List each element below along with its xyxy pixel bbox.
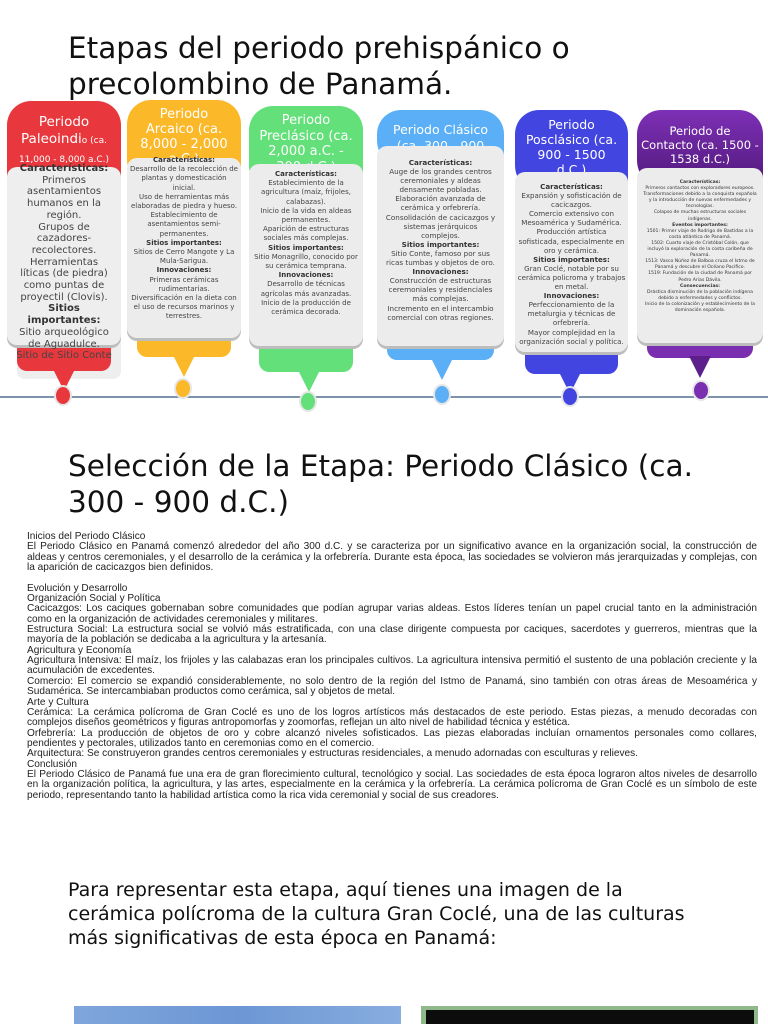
card: Paleoindio: Características: [20,163,108,174]
text block: periodo clásico: El Periodo Clásico en Panamá comenzó alrededor del año 300 d.C. y se caracteriza por un significativo avance en la organización social, la construcción de aldeas y centros ceremoniales, y el desarrollo de la cerámica y la orfebrería. Durante esta época, las sociedades se volvieron más jerarquizadas y complejas, con la aparición de cacicazgos bien definidos. [27,541,757,573]
card: Clásico: Características: [409,158,472,167]
card: Contacto [637,110,763,401]
card: Paleoindio: Sitio de Sitio Conte [16,350,112,361]
heading: selección [68,449,693,519]
card: Contacto: Periodo de [670,124,730,138]
card: Preclásico: Sitio Monagrillo, conocido por su cerámica temprana. [254,253,358,270]
card: Preclásico: Innovaciones: [279,271,333,279]
card: Posclásico: Mayor complejidad en la organización social y política. [519,328,624,346]
card: Preclásico: Periodo [282,113,330,128]
card: Arcaico: Desarrollo de la recolección de plantas y domesticación inicial. [130,165,238,192]
card: Contacto: 1538 d.C.) [670,152,730,166]
text block: periodo clásico: Conclusión [27,759,77,770]
card: Contacto: Drástica disminución de la población indígena debido a enfermedades y conflictos. [647,290,753,301]
card: Paleoindio: Paleoindio (ca. [21,131,107,147]
card: Contacto: Colapso de muchas estructuras sociales indígenas. [654,210,746,222]
text block: periodo clásico: Evolución y Desarrollo [27,583,127,594]
card: Clásico: Elaboración avanzada de cerámica y orfebrería. [395,194,486,212]
card: Contacto: Transformaciones debido a la conquista española y la introducción de nuevas enfermedades y tecnologías. [643,192,757,209]
text block: periodo clásico [27,531,757,801]
card: Clásico: Consolidación de cacicazgos y sistemas jerárquicos complejos. [386,213,495,240]
card: Arcaico [127,100,241,399]
card: Posclásico: Producción artística sofisticada, especialmente en oro y cerámica. [519,227,624,255]
card: Arcaico: Arcaico (ca. [146,122,222,137]
card: Paleoindio: 11,000 - 8,000 a.C.) [19,155,109,165]
card: Arcaico: a.C.) [169,152,199,167]
card: Paleoindio: Grupos de cazadores-recolectores. [32,222,96,256]
card: Posclásico: Perfeccionamiento de la metalurgia y técnicas de orfebrería. [528,300,615,327]
card: Contacto: Inicio de la colonización y establecimiento de la dominación española. [645,302,755,313]
card: Preclásico: 2,000 a.C. - [268,144,344,159]
card: Clásico: Auge de los grandes centros ceremoniales y aldeas densamente pobladas. [389,167,492,194]
card: Clásico: Construcción de estructuras ceremoniales y residenciales más complejas. [389,276,492,303]
title: Etapas del periodo prehispánico o [68,31,570,65]
card: Contacto: Contacto (ca. 1500 - [641,138,759,152]
card: Preclásico: Preclásico (ca. [259,128,353,144]
text block: intro imagen [68,879,685,949]
card: Posclásico: Posclásico (ca. [526,132,617,147]
card: Clásico: Sitios importantes: [402,240,479,249]
title [68,31,570,101]
card: Contacto: 1513: Vasco Núñez de Balboa cruza el Istmo de Panamá y descubre el Océano Pacífico. [645,259,755,270]
card: Arcaico: Innovaciones: [157,266,211,274]
text block: periodo clásico: El Periodo Clásico de Panamá fue una era de gran florecimiento cultural, tecnológico y social. Las sociedades de esta época lograron altos niveles de desarrollo en la organización política, la agricultura, y las artes, especialmente en la cerámica y la orfebrería. La cerámica polícroma de Gran Coclé es un símbolo de este periodo, representando tanto la habilidad artística como la rica vida ceremonial y social de sus creadores. [27,769,757,801]
card: Contacto: Consecuencias: [680,284,720,289]
card: Preclásico: Inicio de la vida en aldeas permanentes. [260,207,352,224]
card: Contacto: Características: [680,180,720,185]
image: left (blue) [74,1006,401,1024]
card: Preclásico: Inicio de la producción de cerámica decorada. [261,299,351,316]
text block: periodo clásico: Agricultura y Economía [27,645,131,656]
text block: periodo clásico: Comercio: El comercio se expandió considerablemente, no solo dentro de la región del Istmo de Panamá, sino también con otras áreas de Mesoamérica y Sudamérica. Se intercambiaban productos como cerámica, sal y objetos de metal. [27,676,757,697]
card: Posclásico: Expansión y sofisticación de cacicazgos. [521,191,622,209]
text block: periodo clásico: Cerámica: La cerámica polícroma de Gran Coclé es uno de los logros artísticos más destacados de este periodo. Estas piezas, a menudo decoradas con complejos diseños geométricos y figuras antropomorfas y zoomorfas, reflejan un alto nivel de habilidad técnica y estética. [27,707,757,728]
card: Clásico [377,110,504,405]
card: Posclásico: Innovaciones: [544,291,599,300]
text block: intro imagen: más significativas de esta época en Panamá: [68,927,497,949]
card: Posclásico: Características: [540,182,603,191]
card: Clásico: (ca. 300 - 900 [397,138,484,153]
card: Preclásico: 300 d.C.) [276,160,336,174]
card: Posclásico: Sitios importantes: [533,255,610,264]
card: Paleoindio: Sitio arqueológico de Aguadulce. [19,327,109,350]
card: Clásico: Incremento en el intercambio comercial con otras regiones. [387,304,494,322]
text block: intro imagen: cerámica polícroma de la cultura Gran Coclé, una de las culturas [68,903,685,925]
card: Preclásico: Aparición de estructuras sociales más complejas. [263,225,349,242]
card: Posclásico [515,110,628,407]
text block: intro imagen: Para representar esta etapa, aquí tienes una imagen de la [68,879,623,901]
card: Preclásico: Establecimiento de la agricultura (maíz, frijoles, calabazas). [261,179,351,206]
card: Contacto: 1519: Fundación de la ciudad de Panamá por Pedro Arias Dávila. [648,271,752,282]
card: Arcaico: Sitios de Cerro Mangote y La Mula-Sarigua. [134,248,234,265]
card: Posclásico: d.C.) [557,162,586,177]
card: Paleoindio: Primeros asentamientos humanos en la región. [27,175,101,221]
heading: selección: Selección de la Etapa: Periodo Clásico (ca. [68,449,693,483]
card: Clásico: Periodo Clásico [393,122,488,137]
card: Preclásico [249,106,363,412]
card: Preclásico: Desarrollo de técnicas agrícolas más avanzadas. [261,280,351,298]
card: Contacto: 1502: Cuarto viaje de Cristóbal Colón, que incluyó la exploración de la costa caribeña de Panamá. [647,241,753,258]
title: precolombino de Panamá. [68,67,452,101]
card: Posclásico: Comercio extensivo con Mesoamérica y Sudamérica. [521,209,622,227]
card: Posclásico: Gran Coclé, notable por su cerámica policroma y trabajos en metal. [518,264,625,291]
timeline line [0,396,768,398]
card: Paleoindio [7,101,121,406]
card: Preclásico: Características: [275,170,337,178]
card: Arcaico: 8,000 - 2,000 [140,137,228,152]
card: Contacto: 1501: Primer viaje de Rodrigo de Bastidas a la costa atlántica de Panamá. [647,229,753,240]
card: Clásico: Innovaciones: [412,267,469,276]
card: Paleoindio: Sitios importantes: [28,303,100,326]
text block: periodo clásico: Arquitectura: Se construyeron grandes centros ceremoniales y estructuras residenciales, a menudo adornadas con esculturas y relieves. [27,748,638,759]
card: Preclásico: Sitios importantes: [268,244,344,252]
text block: periodo clásico: Orfebrería: La producción de objetos de oro y cobre alcanzó niveles sofisticados. Las piezas elaboradas incluían ornamentos personales como collares, pendientes y pectorales, utilizados tanto en ceremonias como en el comercio. [27,728,757,749]
image: right (ceramic) [421,1006,758,1024]
card: Arcaico: Uso de herramientas más elaboradas de piedra y hueso. [131,193,237,210]
card: Contacto: Primeros contactos con exploradores europeos. [645,186,755,191]
card: Clásico: d.C.) [426,154,455,169]
card: Paleoindio: Periodo [39,114,89,130]
text block: periodo clásico: Arte y Cultura [27,696,89,708]
text block: periodo clásico: Cacicazgos: Los caciques gobernaban sobre comunidades que podían agrupar varias aldeas. Estos líderes tenían un papel crucial tanto en la administración como en la organización de actividades ceremoniales y militares. [27,603,757,625]
heading: selección: 300 - 900 d.C.) [68,485,289,519]
text block: periodo clásico: Agricultura Intensiva: El maíz, los frijoles y las calabazas eran los principales cultivos. La agricultura intensiva permitió el sustento de una población creciente y la acumulación de excedentes. [27,655,757,676]
card: Arcaico: Primeras cerámicas rudimentarias. [150,276,218,293]
card: Contacto: Eventos importantes: [672,223,728,228]
card: Posclásico: Periodo [548,117,595,132]
card: Clásico: Sitio Conte, famoso por sus ricas tumbas y objetos de oro. [386,249,495,267]
card: Arcaico: Características: [153,156,215,164]
card: Arcaico: Diversificación en la dieta con el uso de recursos marinos y terrestres. [131,294,237,320]
card: Posclásico: 900 - 1500 [537,147,606,162]
card: Arcaico: Periodo [160,107,208,122]
text block: periodo clásico: Estructura Social: La estructura social se volvió más estratificada, con una clase dirigente compuesta por caciques, sacerdotes y guerreros, mientras que la mayoría de la población se dedicaba a la agricultura y la artesanía. [27,624,757,645]
text block: periodo clásico: Inicios del Periodo Clásico [27,531,145,542]
card: Arcaico: Establecimiento de asentamientos semi-permanentes. [147,211,221,238]
card: Arcaico: Sitios importantes: [146,239,222,247]
text block: periodo clásico: Organización Social y Política [27,593,161,604]
card: Paleoindio: Herramientas líticas (de piedra) como puntas de proyectil (Clovis). [20,257,108,303]
